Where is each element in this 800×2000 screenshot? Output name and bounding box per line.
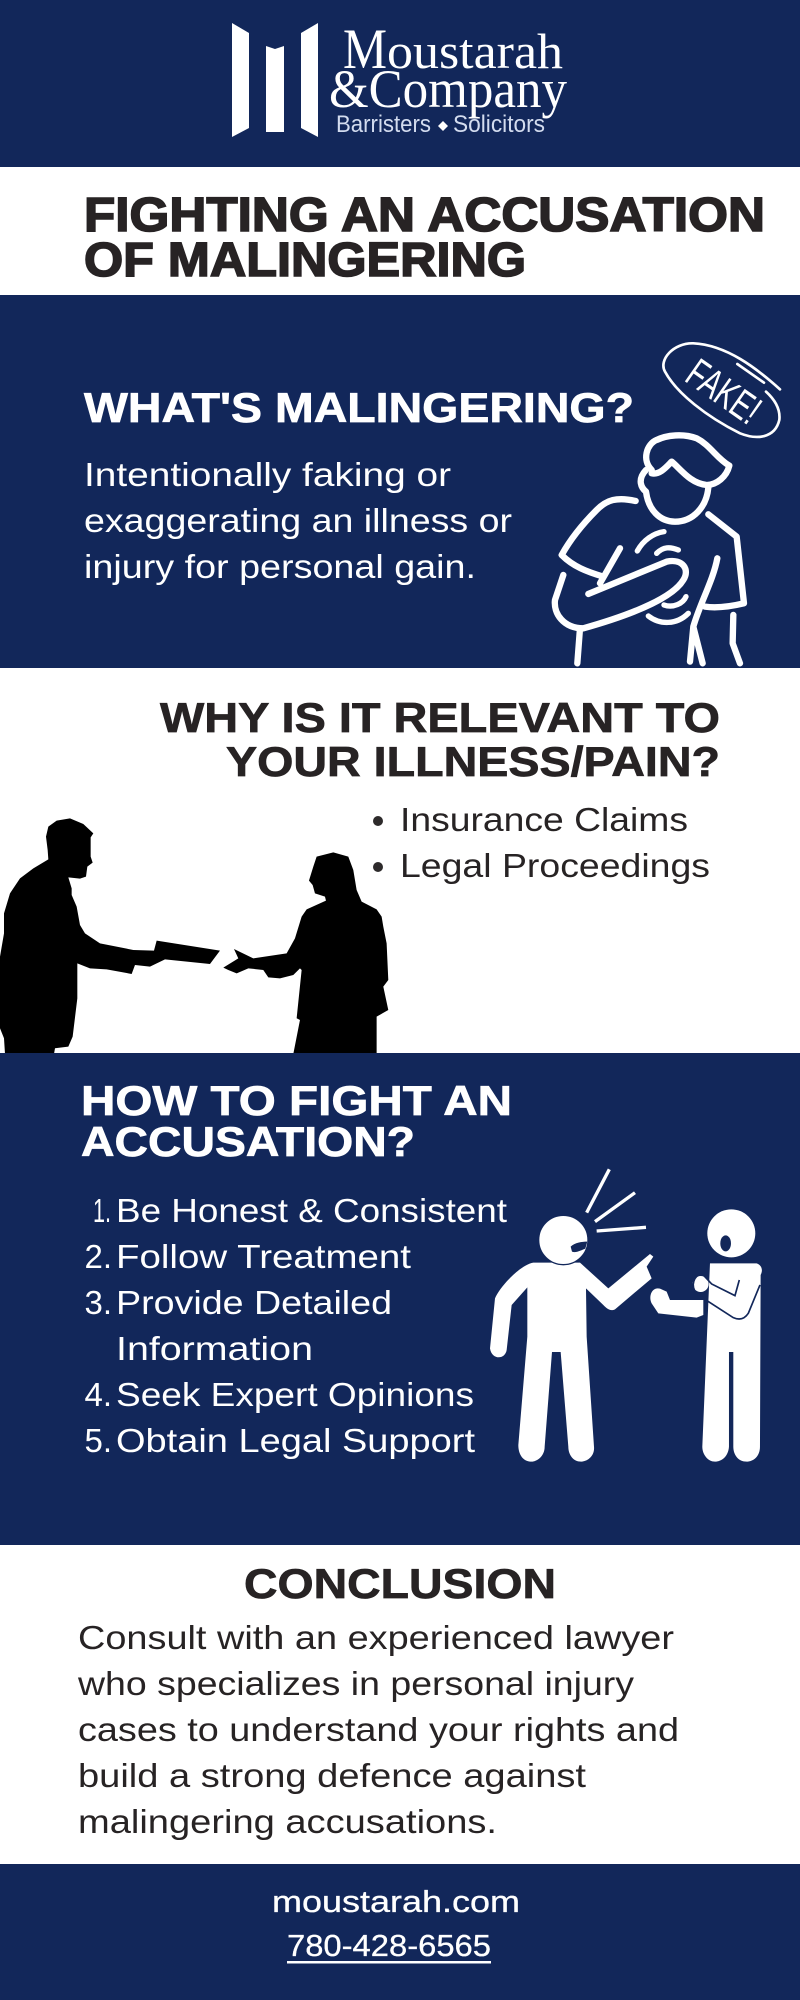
text block: definition bbox=[84, 456, 512, 585]
logo wordmark: Barristers bbox=[336, 111, 431, 138]
icon: man silhouette bbox=[0, 818, 220, 1054]
numbered list bbox=[84, 1192, 507, 1459]
panel: conclusion bbox=[77, 1560, 679, 1840]
numbered list: 4. bbox=[84, 1376, 112, 1413]
text block: conclusion: cases to understand your rights and bbox=[78, 1711, 679, 1748]
heading: CONCLUSION bbox=[244, 1560, 556, 1607]
icon: silhouettes handing over document bbox=[0, 818, 388, 1054]
panel: why is it relevant bbox=[0, 694, 720, 1054]
icon: fake stamp bbox=[663, 343, 780, 437]
icon: man bbox=[555, 435, 744, 663]
phone: 780-428-6565 bbox=[287, 1928, 491, 1963]
numbered list: Follow Treatment bbox=[116, 1238, 411, 1275]
heading bbox=[81, 1077, 512, 1165]
bullet list: Legal Proceedings bbox=[400, 847, 710, 884]
numbered list: Be Honest & Consistent bbox=[116, 1192, 507, 1229]
text block: definition: injury for personal gain. bbox=[84, 548, 476, 585]
icon: logo columns bbox=[232, 23, 318, 137]
logo wordmark: oustarah bbox=[387, 23, 563, 79]
text block: conclusion: who specializes in personal injury bbox=[77, 1665, 635, 1702]
numbered list: Obtain Legal Support bbox=[116, 1422, 475, 1459]
numbered list: 2. bbox=[84, 1238, 112, 1275]
title: FIGHTING AN ACCUSATION bbox=[84, 189, 765, 242]
text block: definition: exaggerating an illness or bbox=[84, 502, 512, 539]
numbered list: 3. bbox=[84, 1284, 112, 1321]
logo wordmark: M bbox=[343, 18, 387, 81]
numbered list: 1. bbox=[93, 1192, 111, 1229]
icon: shouting person bbox=[490, 1169, 653, 1462]
logo wordmark bbox=[329, 18, 567, 138]
text block: definition: Intentionally faking or bbox=[84, 456, 451, 493]
bullet list: Insurance Claims bbox=[400, 801, 688, 838]
numbered list: 5. bbox=[84, 1422, 112, 1459]
bullet list bbox=[373, 801, 710, 884]
heading: ACCUSATION? bbox=[81, 1118, 415, 1165]
panel: footer bbox=[0, 1864, 800, 2000]
website: moustarah.com bbox=[272, 1884, 520, 1919]
panel: what's malingering bbox=[0, 295, 800, 668]
text block: conclusion: build a strong defence against bbox=[78, 1757, 586, 1794]
icon: woman silhouette bbox=[223, 852, 388, 1054]
heading: WHY IS IT RELEVANT TO bbox=[160, 694, 720, 741]
heading: YOUR ILLNESS/PAIN? bbox=[226, 738, 720, 785]
title: OF MALINGERING bbox=[84, 234, 526, 287]
icon: fake stamp: FAKE! bbox=[678, 350, 770, 433]
numbered list: Information bbox=[116, 1330, 313, 1367]
title bbox=[84, 189, 765, 287]
heading: HOW TO FIGHT AN bbox=[81, 1077, 512, 1124]
logo wordmark: Solicitors bbox=[453, 111, 545, 138]
numbered list: Seek Expert Opinions bbox=[116, 1376, 474, 1413]
logo wordmark: &Company bbox=[329, 59, 567, 119]
heading: WHAT'S MALINGERING? bbox=[84, 384, 634, 431]
text block: conclusion bbox=[77, 1619, 679, 1840]
panel: how to fight an accusation bbox=[0, 1053, 800, 1545]
heading bbox=[160, 694, 720, 785]
icon: accused person bbox=[650, 1209, 762, 1462]
icon: man holding arm with fake label bbox=[555, 343, 780, 663]
icon: person shouting at another person bbox=[490, 1169, 762, 1462]
numbered list: Provide Detailed bbox=[116, 1284, 392, 1321]
text block: conclusion: malingering accusations. bbox=[78, 1803, 497, 1840]
panel: logo header bbox=[0, 0, 800, 167]
text block: conclusion: Consult with an experienced lawyer bbox=[78, 1619, 674, 1656]
